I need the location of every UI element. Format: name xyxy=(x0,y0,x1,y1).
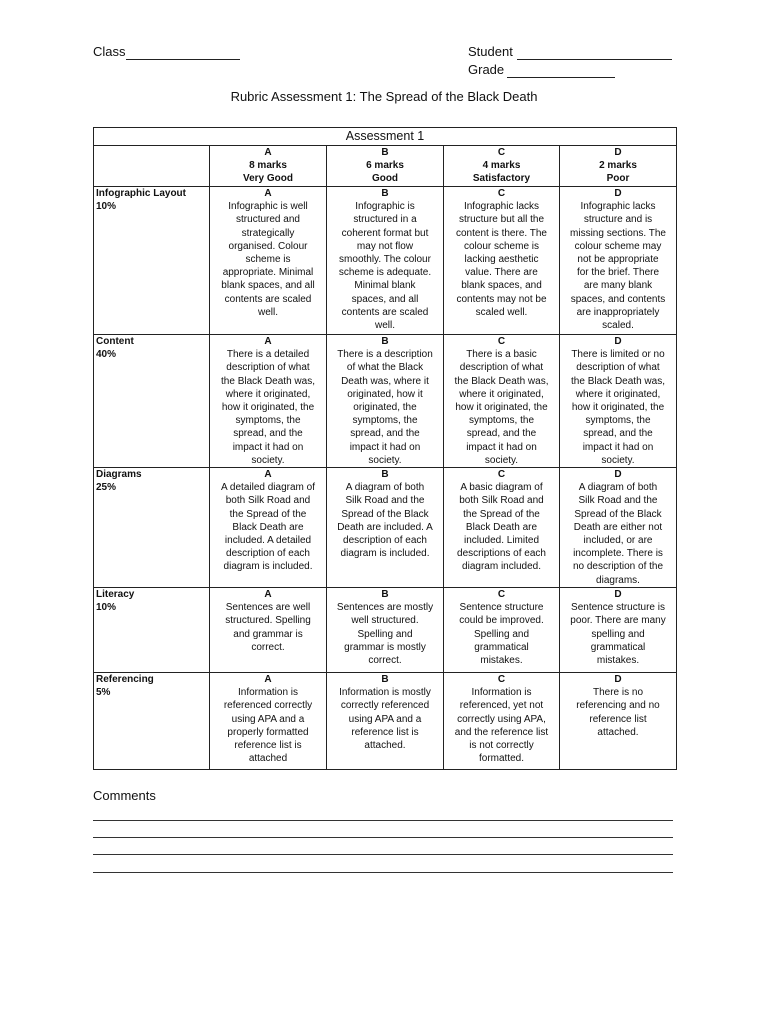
rubric table: formatted. xyxy=(479,753,524,764)
rubric table: There is limited or no xyxy=(571,349,665,360)
rubric table: B xyxy=(381,589,389,600)
rubric table: A xyxy=(264,147,272,158)
rubric table: 6 marks xyxy=(366,160,404,171)
rubric table: blank spaces, and xyxy=(461,280,542,291)
rubric table: referenced correctly xyxy=(224,700,312,711)
rubric table: blank spaces, and all xyxy=(221,280,315,291)
rubric table: coherent format but xyxy=(342,228,428,239)
field: student xyxy=(468,44,672,60)
rubric table: colour scheme is xyxy=(464,241,539,252)
rubric table: 10% xyxy=(96,201,116,212)
rubric table: well structured. xyxy=(351,615,419,626)
rubric table: colour scheme may xyxy=(575,241,661,252)
rubric table: diagram included. xyxy=(462,561,541,572)
rubric table: smoothly. The colour xyxy=(339,254,431,265)
field: class xyxy=(93,44,240,60)
rubric table: Spelling and xyxy=(474,629,529,640)
rubric table: symptoms, the xyxy=(469,415,534,426)
rubric table: poor. There are many xyxy=(570,615,666,626)
rubric table: D xyxy=(614,674,622,685)
rubric table: reference list is xyxy=(351,727,419,738)
rubric table: how it originated, the xyxy=(222,402,314,413)
rubric table: C xyxy=(498,188,505,199)
rubric table: is not correctly xyxy=(469,740,534,751)
rubric table: Spread of the Black xyxy=(341,509,429,520)
rubric table: grammatical xyxy=(591,642,645,653)
rubric table: spread, and the xyxy=(583,428,653,439)
rubric table: description of what xyxy=(460,362,543,373)
rubric table: Good xyxy=(372,173,398,184)
rubric table: incomplete. There is xyxy=(573,548,663,559)
rubric table: There is a description xyxy=(337,349,433,360)
rubric table: B xyxy=(381,147,389,158)
rubric table: impact it had on xyxy=(233,442,303,453)
rubric table: the Black Death was, xyxy=(221,376,315,387)
rubric table: A diagram of both xyxy=(346,482,424,493)
rubric table: 40% xyxy=(96,349,116,360)
rubric table: Sentences are mostly xyxy=(337,602,433,613)
rubric table: the Black Death was, xyxy=(571,376,665,387)
rubric table: B xyxy=(381,188,389,199)
rubric table: Infographic lacks xyxy=(464,201,539,212)
rubric table: Infographic lacks xyxy=(580,201,656,212)
rubric table: scaled. xyxy=(602,320,634,331)
rubric table: properly formatted xyxy=(227,727,309,738)
field: class: Class xyxy=(93,44,126,59)
rubric table: structure and is xyxy=(584,214,652,225)
rubric table: B xyxy=(381,469,389,480)
rubric table: appropriate. Minimal xyxy=(223,267,313,278)
rubric table: Sentence structure is xyxy=(571,602,665,613)
rubric table: originated, the xyxy=(353,402,417,413)
rubric table: attached xyxy=(249,753,287,764)
rubric table: description of what xyxy=(576,362,660,373)
rubric table: correct. xyxy=(368,655,402,666)
rubric table: contents may not be xyxy=(456,294,547,305)
rubric table: 10% xyxy=(96,602,116,613)
rubric table: impact it had on xyxy=(466,442,537,453)
rubric table: scheme is xyxy=(245,254,290,265)
rubric table: spaces, and contents xyxy=(571,294,665,305)
rubric table: 2 marks xyxy=(599,160,637,171)
rubric table: D xyxy=(614,188,622,199)
rubric table: Death was, where it xyxy=(341,376,429,387)
rubric table: Very Good xyxy=(243,173,293,184)
title: Rubric Assessment 1: The Spread of the Black Death xyxy=(231,89,537,104)
rubric table: reference list is xyxy=(234,740,302,751)
rubric table: descriptions of each xyxy=(457,548,546,559)
comment lines xyxy=(93,820,673,873)
rubric table: correctly using APA, xyxy=(457,714,546,725)
rubric table: how it originated, the xyxy=(455,402,548,413)
rubric table: spread, and the xyxy=(467,428,536,439)
rubric table: contents are scaled xyxy=(342,307,428,318)
rubric table: correct. xyxy=(251,642,285,653)
rubric table: description of each xyxy=(343,535,427,546)
rubric table: how it originated, the xyxy=(572,402,664,413)
rubric table: society. xyxy=(601,455,635,466)
rubric table: Sentences are well xyxy=(226,602,310,613)
rubric table: A xyxy=(264,188,272,199)
rubric table: C xyxy=(498,674,505,685)
rubric table: D xyxy=(614,469,622,480)
rubric table: Black Death are xyxy=(466,522,537,533)
rubric table: symptoms, the xyxy=(352,415,418,426)
rubric table: 8 marks xyxy=(249,160,287,171)
rubric table: 4 marks xyxy=(483,160,520,171)
rubric table: C xyxy=(498,589,505,600)
rubric table: scheme is adequate. xyxy=(339,267,431,278)
rubric table: organised. Colour xyxy=(229,241,307,252)
field: grade: Grade xyxy=(468,62,504,77)
rubric table: spread, and the xyxy=(350,428,420,439)
rubric table: There is a detailed xyxy=(227,349,309,360)
rubric table: D xyxy=(614,336,622,347)
rubric table: Spelling and xyxy=(357,629,413,640)
rubric table: Assessment 1 xyxy=(346,129,424,143)
rubric table: both Silk Road and xyxy=(459,495,544,506)
rubric table: Minimal blank xyxy=(354,280,416,291)
rubric table: referencing and no xyxy=(576,700,660,711)
rubric table: structure but all the xyxy=(459,214,544,225)
rubric table: Content xyxy=(96,336,134,347)
rubric table: for the brief. There xyxy=(577,267,659,278)
rubric table: are inappropriately xyxy=(577,307,659,318)
rubric table: diagrams. xyxy=(596,575,640,586)
rubric table: 25% xyxy=(96,482,116,493)
rubric table: There is no xyxy=(593,687,643,698)
rubric table: strategically xyxy=(242,228,294,239)
rubric table: Silk Road and the xyxy=(579,495,657,506)
rubric table: reference list xyxy=(589,714,647,725)
rubric table: and the reference list xyxy=(455,727,548,738)
rubric table: referenced, yet not xyxy=(460,700,543,711)
rubric table: using APA and a xyxy=(232,714,304,725)
rubric table: Sentence structure xyxy=(460,602,543,613)
rubric table: B xyxy=(381,674,389,685)
rubric table: society. xyxy=(251,455,285,466)
rubric table: where it originated, xyxy=(576,389,660,400)
rubric table: structured in a xyxy=(353,214,417,225)
rubric table: symptoms, the xyxy=(235,415,301,426)
rubric table: A xyxy=(264,336,272,347)
rubric table: Infographic is well xyxy=(228,201,308,212)
rubric table: C xyxy=(498,469,505,480)
rubric table: structured and xyxy=(236,214,300,225)
rubric table: A basic diagram of xyxy=(460,482,543,493)
rubric table: spelling and xyxy=(591,629,645,640)
rubric table: grammar is mostly xyxy=(344,642,426,653)
rubric table: Death are either not xyxy=(574,522,662,533)
rubric table: 5% xyxy=(96,687,110,698)
field: student: Student xyxy=(468,44,513,59)
rubric table: Information is mostly xyxy=(339,687,431,698)
rubric table: well. xyxy=(375,320,395,331)
rubric table: Information is xyxy=(471,687,532,698)
rubric table: where it originated, xyxy=(226,389,310,400)
rubric table: well. xyxy=(258,307,278,318)
rubric table: A xyxy=(264,674,272,685)
rubric table: C xyxy=(498,336,505,347)
rubric table: Death are included. A xyxy=(337,522,433,533)
rubric table: structured. Spelling xyxy=(225,615,311,626)
rubric table: Poor xyxy=(607,173,629,184)
rubric table: value. There are xyxy=(465,267,538,278)
rubric table: could be improved. xyxy=(459,615,544,626)
rubric table: attached. xyxy=(597,727,639,738)
rubric table: A diagram of both xyxy=(579,482,657,493)
rubric table: the Black Death was, xyxy=(455,376,548,387)
rubric table: description of each xyxy=(226,548,310,559)
rubric table: missing sections. The xyxy=(570,228,666,239)
rubric table: using APA and a xyxy=(349,714,421,725)
rubric table: impact it had on xyxy=(350,442,420,453)
rubric table: originated, how it xyxy=(347,389,423,400)
rubric table: Referencing xyxy=(96,674,154,685)
rubric table: are many blank xyxy=(584,280,652,291)
rubric table: attached. xyxy=(364,740,406,751)
rubric table: society. xyxy=(485,455,518,466)
rubric table: spaces, and all xyxy=(352,294,418,305)
rubric table: impact it had on xyxy=(583,442,653,453)
rubric table: Black Death are xyxy=(232,522,304,533)
rubric table: may not flow xyxy=(357,241,413,252)
rubric table: grammatical xyxy=(474,642,529,653)
rubric table: included. Limited xyxy=(464,535,539,546)
rubric table: included, or are xyxy=(584,535,652,546)
rubric table: A detailed diagram of xyxy=(221,482,315,493)
rubric table: Information is xyxy=(238,687,298,698)
rubric table: description of what xyxy=(226,362,310,373)
rubric table: Diagrams xyxy=(96,469,142,480)
rubric table: Satisfactory xyxy=(473,173,530,184)
rubric table: A xyxy=(264,589,272,600)
rubric table: scaled well. xyxy=(476,307,527,318)
rubric table: Literacy xyxy=(96,589,134,600)
rubric table: the Spread of the xyxy=(463,509,540,520)
rubric table: diagram is included. xyxy=(224,561,312,572)
rubric table: both Silk Road and xyxy=(226,495,310,506)
rubric table: Infographic Layout xyxy=(96,188,186,199)
rubric table: mistakes. xyxy=(480,655,523,666)
rubric table: C xyxy=(498,147,505,158)
rubric table: D xyxy=(614,147,622,158)
rubric table: content is there. The xyxy=(456,228,547,239)
rubric table: no description of the xyxy=(573,561,663,572)
field: grade xyxy=(468,62,615,78)
rubric table: of what the Black xyxy=(347,362,423,373)
rubric table xyxy=(93,127,677,770)
rubric table: Silk Road and the xyxy=(346,495,424,506)
rubric table: There is a basic xyxy=(466,349,537,360)
rubric table: A xyxy=(264,469,272,480)
rubric table: D xyxy=(614,589,622,600)
rubric table: contents are scaled xyxy=(225,294,311,305)
rubric table: society. xyxy=(368,455,402,466)
rubric table: spread, and the xyxy=(233,428,303,439)
rubric table: B xyxy=(381,336,389,347)
rubric table: where it originated, xyxy=(459,389,544,400)
rubric table: symptoms, the xyxy=(585,415,651,426)
rubric table: not be appropriate xyxy=(577,254,659,265)
rubric table: included. A detailed xyxy=(225,535,311,546)
comments heading: Comments xyxy=(93,788,156,803)
rubric table: the Spread of the xyxy=(230,509,306,520)
rubric table: lacking aesthetic xyxy=(465,254,538,265)
rubric table: correctly referenced xyxy=(341,700,429,711)
rubric table: Infographic is xyxy=(355,201,415,212)
rubric table: and grammar is xyxy=(233,629,303,640)
rubric table: Spread of the Black xyxy=(574,509,662,520)
rubric table: mistakes. xyxy=(597,655,639,666)
rubric table: diagram is included. xyxy=(341,548,429,559)
